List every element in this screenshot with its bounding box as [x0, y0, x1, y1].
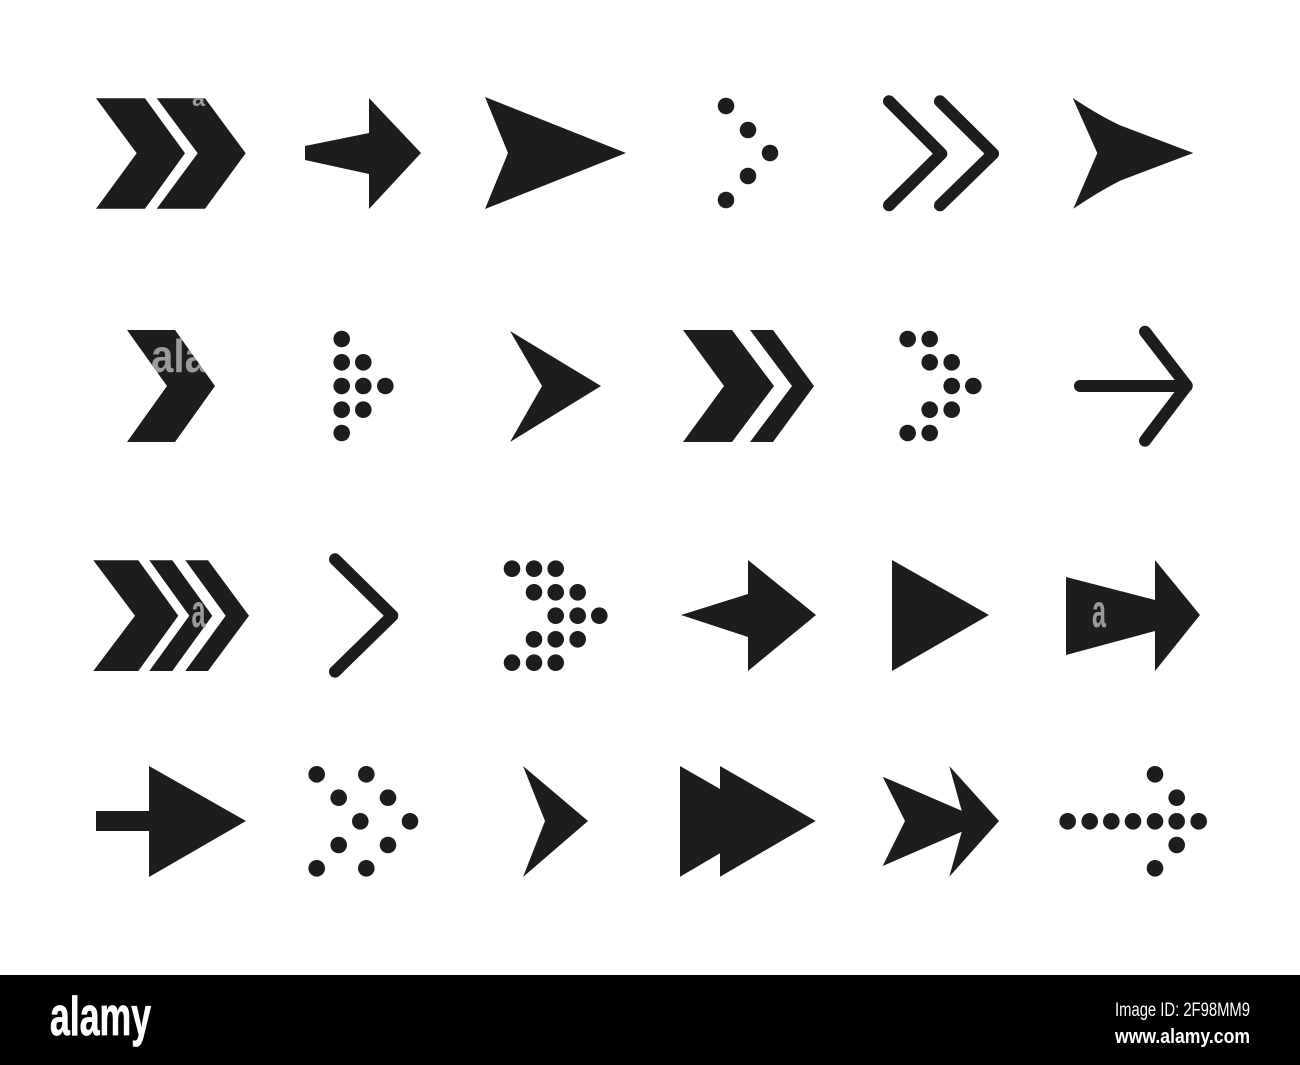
footer bar — [0, 975, 1300, 1065]
icon: play triangle — [892, 560, 989, 671]
icon: tapered arrow — [681, 560, 816, 671]
icon: solid chevron — [127, 330, 215, 442]
watermark fragments: a — [1092, 585, 1106, 637]
icon: outline chevron — [335, 559, 392, 672]
image id: Image ID: 2F98MM9 — [1115, 1000, 1250, 1021]
icon: dart arrow — [485, 97, 626, 209]
watermark fragments: a — [192, 585, 206, 637]
watermark fragments — [151, 85, 1106, 637]
icon: outline double chevron — [889, 101, 993, 205]
icon: navigation arrow — [1073, 98, 1193, 209]
icon: double dart arrow — [883, 766, 999, 877]
icon: fast forward — [680, 766, 816, 877]
icon: dotted double-row chevron — [899, 331, 982, 441]
icon: wide tail arrow — [1066, 560, 1200, 671]
watermark fragments: ala — [151, 330, 207, 382]
logo: alamy: alamy — [50, 985, 151, 1047]
icon: small dart arrow — [510, 331, 601, 442]
icon: dotted line arrow — [1059, 766, 1207, 877]
icon: dotted triangle — [333, 331, 394, 441]
icon: block arrow — [96, 766, 246, 877]
icon: line arrow — [1080, 332, 1187, 441]
watermark fragments: a — [192, 85, 206, 112]
icon: dotted double chevron — [308, 766, 418, 877]
icon: chevron with thin chevron — [683, 330, 814, 442]
icon: double chevron — [96, 98, 246, 209]
icon: dotted chevron — [718, 98, 778, 208]
website: www.alamy.com — [1114, 1026, 1250, 1048]
icon: short tail arrow — [305, 98, 421, 209]
icon: triple chevron — [93, 560, 249, 671]
icon: narrow dart arrow — [523, 766, 588, 877]
icon: dotted triple-row chevron — [504, 560, 608, 671]
icon grid — [93, 97, 1207, 877]
